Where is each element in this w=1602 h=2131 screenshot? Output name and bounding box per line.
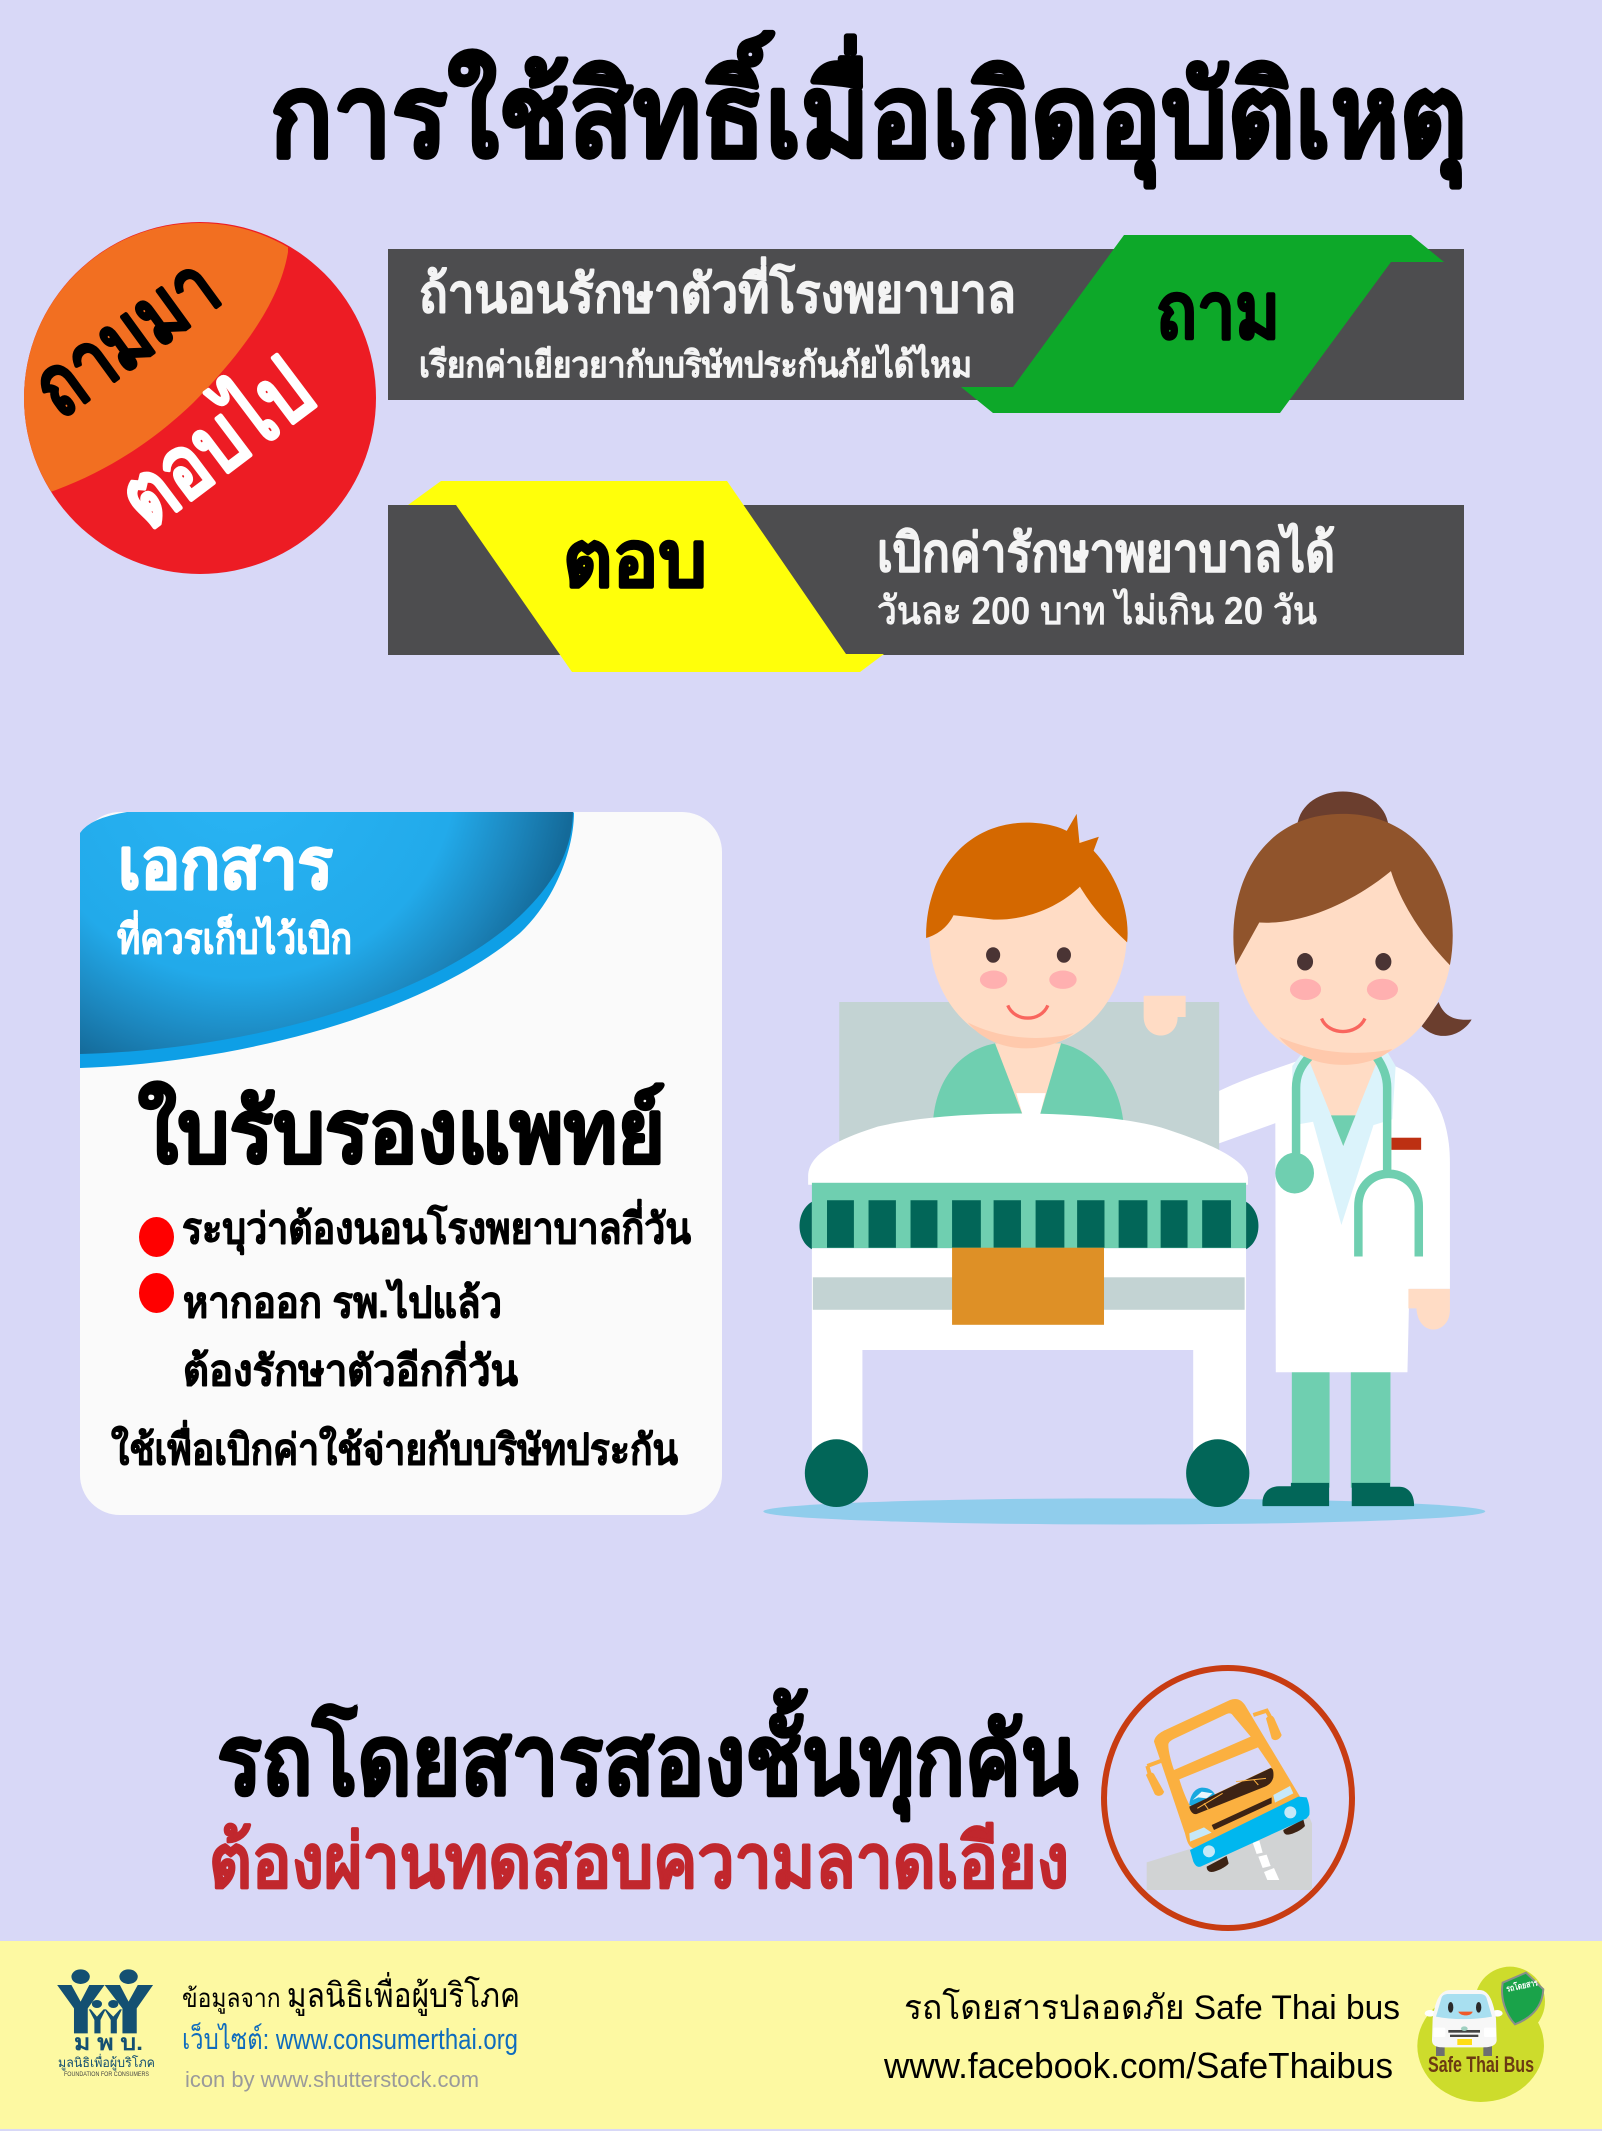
floor shadow	[763, 1498, 1485, 1524]
slogan line 2: ต้องผ่านทดสอบความลาดเอียง	[209, 1819, 1069, 1903]
bullet 1	[139, 1217, 174, 1257]
facebook line: www.facebook.com/SafeThaibus	[883, 2045, 1393, 2086]
badge text: asked: ถามมา	[15, 239, 236, 435]
bullet 1 text: ระบุว่าต้องนอนโรงพยาบาลกี่วัน	[182, 1199, 691, 1255]
answer banner main text: เบิกค่ารักษาพยาบาลได้	[877, 522, 1335, 583]
icon credit: icon by www.shutterstock.com	[185, 2067, 479, 2092]
bullet 2	[139, 1273, 174, 1313]
website line: เว็บไซต์: www.consumerthai.org	[182, 2021, 518, 2056]
logo: foundation for consumers	[57, 1969, 155, 2078]
title: การใช้สิทธิ์เมื่อเกิดอุบัติเหตุ	[270, 31, 1467, 188]
bed	[800, 1113, 1258, 1507]
footer band	[0, 1941, 1602, 2129]
header title: เอกสาร	[118, 825, 333, 903]
logo name: มูลนิธิเพื่อผู้บริโภค	[58, 2054, 155, 2071]
ribbon label: question: ถาม	[1156, 267, 1280, 355]
source line: ข้อมูลจาก มูลนิธิเพื่อผู้บริโภค	[182, 1972, 520, 2016]
question banner sub text: เรียกค่าเยียวยากับบริษัทประกันภัยได้ไหม	[419, 343, 972, 385]
yellow ribbon	[408, 481, 884, 672]
safe thai bus line: รถโดยสารปลอดภัย Safe Thai bus	[904, 1988, 1400, 2027]
question banner main text: ถ้านอนรักษาตัวที่โรงพยาบาล	[419, 256, 1016, 324]
bullet 2 text line 1: หากออก รพ.ไปแล้ว	[183, 1278, 502, 1326]
header subtitle: ที่ควรเก็บไว้เบิก	[117, 910, 352, 962]
bullet 2 text line 2: ต้องรักษาตัวอีกกี่วัน	[183, 1341, 518, 1394]
card header swoosh	[80, 812, 574, 1068]
badge text: answered: ตอบไป	[100, 339, 330, 547]
doctor	[1219, 792, 1472, 1506]
answer banner sub text: วันละ 200 บาท ไม่เกิน 20 วัน	[877, 588, 1317, 633]
doctor's hand on headboard	[1144, 996, 1186, 1036]
slogan line 1: รถโดยสารสองชั้นทุกคัน	[217, 1688, 1078, 1822]
patient	[926, 814, 1128, 1122]
card heading: ใบรับรองแพทย์	[138, 1081, 665, 1181]
panel: question banner	[388, 235, 1464, 413]
green ribbon	[961, 235, 1444, 413]
panel: documents card	[80, 812, 722, 1515]
badge: question and answer	[24, 222, 376, 574]
shield text: รถโดยสาร	[1505, 1977, 1539, 1994]
icon: bus on a slope	[1104, 1668, 1352, 1928]
logo tagline: FOUNDATION FOR CONSUMERS	[64, 2072, 149, 2078]
card footnote: ใช้เพื่อเบิกค่าใช้จ่ายกับบริษัทประกัน	[111, 1420, 678, 1473]
panel: answer banner	[388, 481, 1464, 672]
logo: safe thai bus	[1417, 1967, 1545, 2102]
bed headboard	[839, 1002, 1219, 1157]
logo initials: ม พ บ.	[74, 2030, 143, 2055]
logo name: Safe Thai Bus	[1428, 2052, 1534, 2077]
ribbon label: answer: ตอบ	[563, 515, 707, 603]
illustration: doctor and patient in bed	[763, 792, 1485, 1524]
